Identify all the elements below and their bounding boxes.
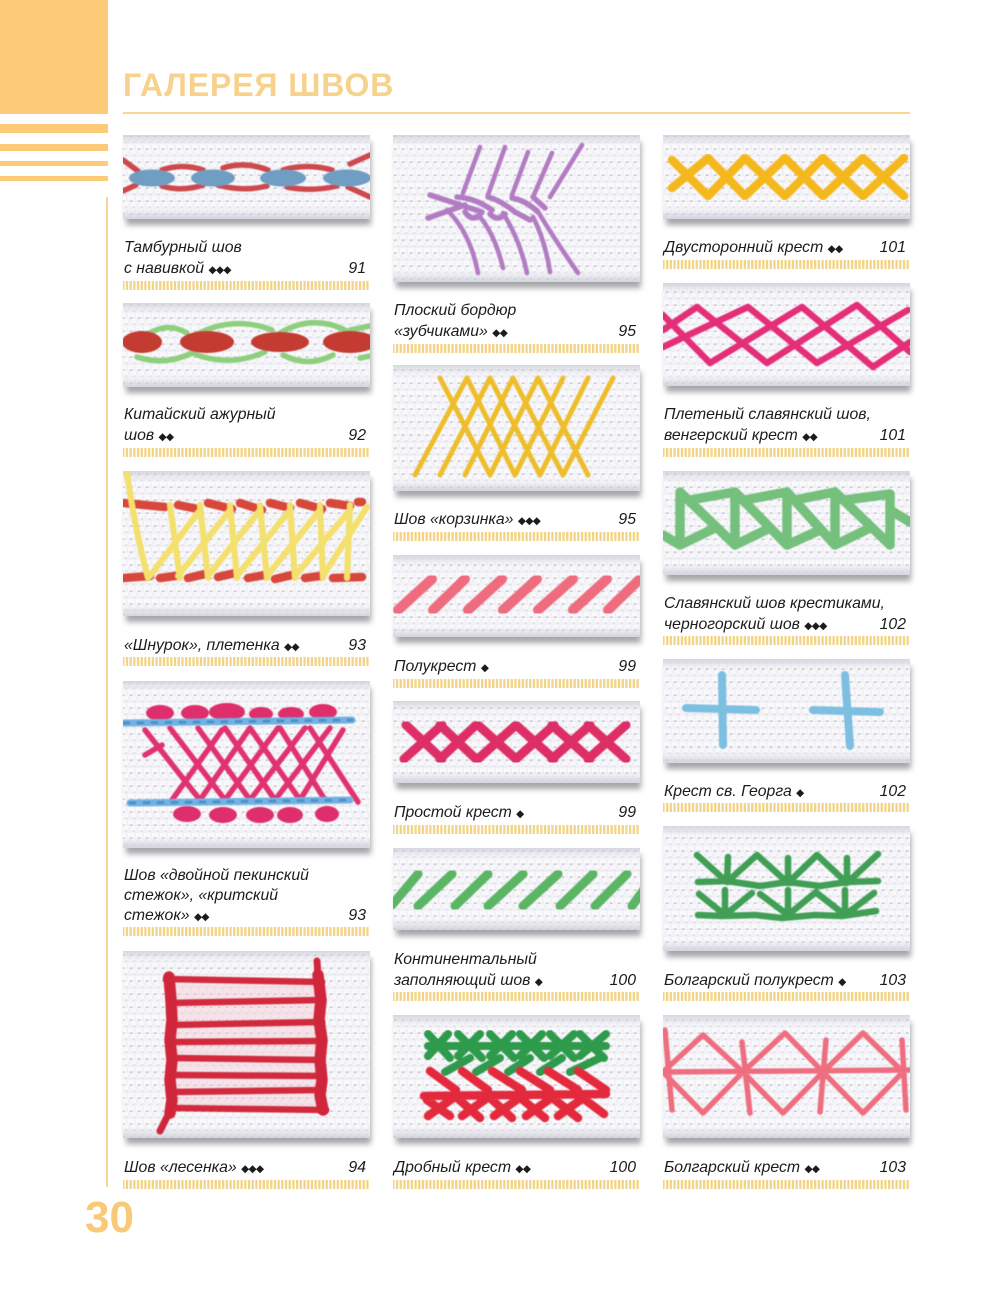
- page number: 30: [85, 1193, 134, 1242]
- label: double Pekinese stitch: Шов «двойной пекинский: [124, 867, 309, 884]
- label: Bulgarian cross: Болгарский крест ◆◆: [664, 1159, 821, 1176]
- panel: half cross: [393, 555, 641, 643]
- stitch: yellow herringbone: [415, 378, 613, 475]
- label: lace braid: 93: [348, 637, 366, 654]
- stitch: green zigzag: [663, 492, 910, 545]
- ribbon: [663, 1180, 910, 1189]
- label: Bulgarian half cross: Болгарский полукрест ◆: [664, 972, 847, 989]
- label: double Pekinese stitch: стежок», «критский: [124, 887, 278, 904]
- label: chain stitch: 91: [348, 260, 366, 277]
- label: Slavic cross stitch: [664, 595, 906, 633]
- stitch: green rows: [428, 1034, 606, 1072]
- label: scalloped flat border: «зубчиками» ◆◆: [394, 323, 509, 340]
- stitch: purple spines: [428, 145, 582, 273]
- label: chain stitch: с навивкой ◆◆◆: [124, 260, 232, 277]
- label: lace braid: «Шнурок», плетенка ◆◆: [124, 637, 300, 654]
- panel: St George cross: [663, 659, 911, 769]
- label: basket stitch: Шов «корзинка» ◆◆◆: [394, 511, 542, 528]
- panel: Bulgarian half cross: [663, 826, 911, 957]
- stitch: red chain: [123, 155, 370, 197]
- label: double Pekinese stitch: стежок» ◆◆: [124, 907, 210, 924]
- panel: Bulgarian cross: [663, 1015, 911, 1144]
- panel: woven Slavic stitch: [663, 283, 911, 392]
- panel: scalloped flat border: [393, 135, 641, 288]
- label: double Pekinese stitch: 93: [348, 907, 366, 924]
- label: ladder stitch: 94: [348, 1159, 366, 1176]
- label: basket stitch: 95: [618, 511, 636, 528]
- label: Slavic cross stitch: Славянский шов крестиками,: [664, 595, 885, 612]
- label: scalloped flat border: 95: [618, 323, 636, 340]
- stitch: yellow lacing: [127, 473, 367, 578]
- panel: ladder stitch: [123, 951, 371, 1144]
- label: woven Slavic stitch: [664, 406, 906, 444]
- panel: continental filling: [392, 848, 645, 936]
- label: continental filling: 100: [610, 972, 636, 989]
- ribbon: [663, 636, 910, 645]
- panel: small cross: [393, 1015, 641, 1144]
- stitch: red runners: [124, 502, 362, 579]
- stitch: pink slants: [398, 579, 640, 610]
- stitch: pink lattice: [145, 728, 358, 802]
- label: small cross: [392, 1159, 636, 1176]
- panel: double Pekinese stitch: [123, 681, 371, 854]
- title rule: [123, 112, 910, 114]
- label: Slavic cross stitch: 102: [880, 616, 906, 633]
- stitch: blue whipping: [129, 170, 371, 186]
- label: continental filling: [393, 951, 636, 989]
- label: ladder stitch: [124, 1159, 366, 1176]
- label: scalloped flat border: [394, 302, 636, 340]
- ribbon: [123, 1180, 370, 1189]
- ribbon: [663, 992, 910, 1001]
- panel: chain stitch with whipping: [123, 135, 371, 225]
- ribbon: [393, 679, 640, 688]
- ribbon: [123, 927, 370, 936]
- label: Bulgarian cross: [664, 1159, 906, 1176]
- label: Bulgarian half cross: 103: [880, 972, 906, 989]
- label: basket stitch: [394, 511, 636, 528]
- stitch: red side columns: [160, 961, 323, 1131]
- label: half cross: 99: [618, 658, 636, 675]
- label: chain stitch: Тамбурный шов: [124, 239, 242, 256]
- ribbon: [393, 992, 640, 1001]
- title: ГАЛЕРЕЯ ШВОВ: [123, 67, 394, 103]
- stitch: green slants: [392, 874, 645, 906]
- label: ladder stitch: Шов «лесенка» ◆◆◆: [124, 1159, 265, 1176]
- label: double Pekinese stitch: [124, 867, 366, 924]
- label: woven Slavic stitch: венгерский крест ◆◆: [664, 427, 819, 444]
- label: simple cross: 99: [618, 804, 636, 821]
- label: two-sided cross: 101: [880, 239, 906, 256]
- ribbon: [123, 281, 370, 290]
- label: woven Slavic stitch: Плетеный славянский шов,: [664, 406, 871, 423]
- ribbon: [663, 448, 910, 457]
- stitch: yellow crosses: [672, 158, 904, 196]
- label: small cross: 100: [610, 1159, 636, 1176]
- stitch: pink knots: [146, 703, 339, 823]
- label: continental filling: заполняющий шов ◆: [393, 972, 544, 989]
- ribbon: [663, 260, 910, 269]
- label: St George cross: Крест св. Георга ◆: [664, 783, 805, 800]
- ribbon: [393, 344, 640, 353]
- corner block: [0, 0, 108, 114]
- label: Slavic cross stitch: черногорский шов ◆◆◆: [664, 616, 828, 633]
- stitch: red blobs: [122, 331, 377, 353]
- panel: two-sided cross: [663, 135, 911, 225]
- stitch: blue runners: [124, 720, 352, 803]
- ribbon: [123, 448, 370, 457]
- label: Chinese openwork: Китайский ажурный: [124, 406, 276, 423]
- label: St George cross: [664, 783, 906, 800]
- ribbon: [393, 1180, 640, 1189]
- corner stripes: [0, 124, 108, 181]
- stitch: pink crosses: [404, 725, 626, 759]
- label: chain stitch: [124, 239, 366, 277]
- ribbon: [393, 825, 640, 834]
- left vertical line: [106, 197, 108, 1187]
- label: half cross: Полукрест ◆: [394, 658, 490, 675]
- label: two-sided cross: Двусторонний крест ◆◆: [662, 239, 844, 256]
- label: woven Slavic stitch: 101: [880, 427, 906, 444]
- label: simple cross: Простой крест ◆: [394, 804, 525, 821]
- label: Chinese openwork: шов ◆◆: [124, 427, 175, 444]
- label: Chinese openwork: 92: [348, 427, 366, 444]
- label: scalloped flat border: Плоский бордюр: [394, 302, 517, 319]
- label: Chinese openwork: [124, 406, 366, 444]
- stitch: blue crosses: [686, 675, 880, 746]
- ribbon: [663, 803, 910, 812]
- ribbon: [123, 657, 370, 666]
- label: St George cross: 102: [880, 783, 906, 800]
- panel: basket stitch: [393, 365, 641, 497]
- panel: lace braid: [123, 471, 371, 622]
- label: small cross: Дробный крест ◆◆: [392, 1159, 532, 1176]
- ribbon: [393, 532, 640, 541]
- label: half cross: [394, 658, 636, 675]
- panel: Chinese openwork: [122, 303, 377, 393]
- panel: Slavic cross stitch: [663, 471, 911, 581]
- stitch: green loops: [137, 323, 370, 362]
- stitch: red rungs: [166, 979, 326, 1110]
- stitch: green fans: [697, 854, 878, 918]
- stitch: pink lattice: [663, 305, 910, 367]
- panel: simple cross: [393, 701, 641, 789]
- label: continental filling: Континентальный: [394, 951, 537, 968]
- label: simple cross: [394, 804, 636, 821]
- stitch: pink diamonds: [663, 1030, 910, 1113]
- label: Bulgarian cross: 103: [880, 1159, 906, 1176]
- stitch: red rows: [424, 1071, 606, 1118]
